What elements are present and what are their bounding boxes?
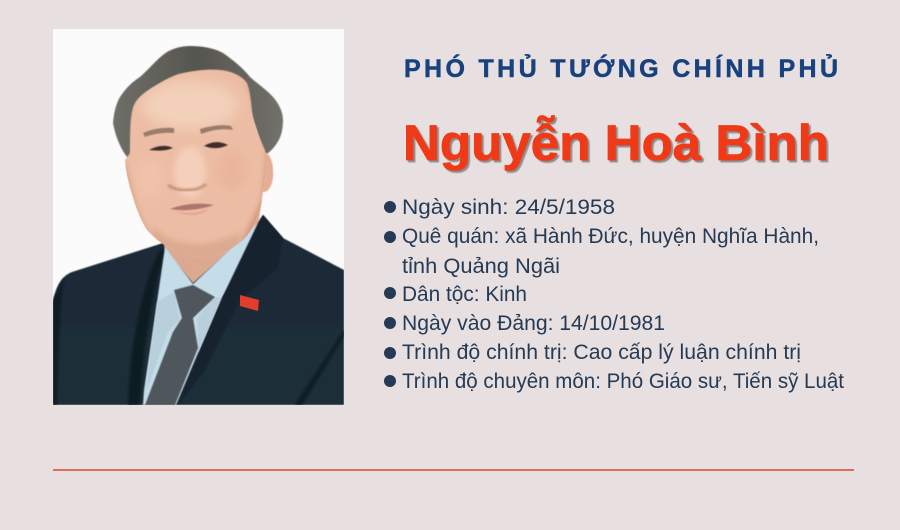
bullet: hometown: tỉnh Quảng Ngãi: [402, 255, 560, 278]
hair: [113, 46, 283, 160]
bullet: date of birth: Ngày sinh: 24/5/1958: [402, 196, 615, 219]
job title heading: PHÓ THỦ TƯỚNG CHÍNH PHỦ: [404, 53, 838, 83]
bullet: political level: Trình độ chính trị: Cao cấp lý luận chính trị: [402, 341, 801, 364]
name heading: Nguyễn Hoà Bình: [403, 115, 829, 171]
eyebrows: [143, 125, 233, 137]
bullet: professional level: Trình độ chuyên môn: Phó Giáo sư, Tiến sỹ Luật: [402, 370, 844, 393]
name heading: Nguyễn Hoà Bình: [405, 117, 831, 173]
bullet: hometown: Quê quán: xã Hành Đức, huyện Nghĩa Hành,: [402, 225, 819, 248]
eyes: [149, 142, 228, 151]
nose: [168, 184, 206, 190]
face shading: [125, 77, 266, 257]
neck: [162, 200, 262, 283]
shirt collar and front: [143, 223, 258, 405]
bullet: hometown: [384, 225, 819, 278]
portrait photo: [53, 29, 344, 405]
jacket seams: [53, 250, 344, 405]
mouth: [170, 204, 214, 210]
ear: [260, 152, 273, 192]
jacket: [53, 215, 344, 405]
necktie: [145, 285, 215, 405]
bullet: ethnicity: Dân tộc: Kinh: [402, 283, 527, 306]
shirt shadow: [146, 292, 222, 392]
biography list: [384, 196, 844, 393]
bullet: party entry date: Ngày vào Đảng: 14/10/1981: [402, 312, 665, 335]
face: [125, 70, 265, 257]
flag pin: [240, 295, 259, 311]
right lapel: [178, 215, 283, 405]
